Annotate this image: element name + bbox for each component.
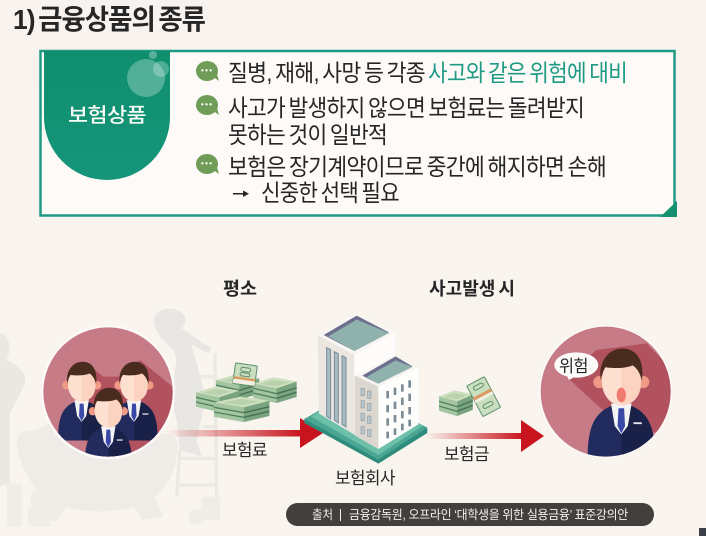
title: 1) 금융상품의 종류 — [13, 4, 205, 35]
speech bubble — [554, 352, 598, 380]
bullet text 3: 보험은 장기계약이므로 중간에 해지하면 손해 — [228, 154, 606, 180]
bundle upright — [233, 363, 257, 386]
building base — [304, 408, 427, 464]
source pill: 금융감독원, 오프라인 ‘대학생을 위한 실용금융’ 표준강의안 — [349, 508, 629, 522]
bullet text 1: 질병, 재해, 사망 등 각종 — [228, 60, 425, 86]
badge: 보험상품 — [44, 51, 170, 180]
tower window strips — [327, 348, 346, 427]
ghost: coins — [7, 483, 220, 527]
label: premium: 보험료 — [222, 441, 267, 460]
lower block — [355, 376, 378, 449]
ghost: left person — [0, 333, 25, 487]
ghost background illustration — [0, 309, 220, 527]
icon: speech bubble 2: ••• — [201, 100, 212, 109]
icon: speech bubble 3: ••• — [201, 159, 212, 168]
arrow glyph — [233, 190, 249, 197]
corner fold — [660, 201, 677, 217]
ghost: ladder — [177, 353, 217, 497]
circle: person in danger — [539, 325, 673, 461]
arrow: payout — [426, 420, 544, 452]
arrow: premium — [165, 418, 323, 448]
icon: speech bubble 3 — [196, 154, 219, 174]
ghost: piggy pot — [17, 418, 178, 522]
bullet text 3 conclusion: 신중한 선택 필요 — [261, 180, 399, 206]
corner mark — [699, 528, 706, 536]
bullet text 2 continued: 못하는 것이 일반적 — [228, 122, 387, 148]
icon: speech bubble 2 — [196, 95, 219, 115]
figure: front man — [85, 388, 132, 457]
front windows — [386, 380, 411, 438]
heading: normal times: 평소 — [223, 279, 257, 299]
mouth — [617, 388, 626, 402]
money: premium stacks — [196, 363, 297, 422]
source pill — [286, 503, 654, 526]
panel: insurance product description — [40, 51, 677, 217]
money: payout — [439, 377, 501, 417]
circle: three policyholders — [41, 325, 177, 466]
bullet text 2: 사고가 발생하지 않으면 보험료는 돌려받지 — [228, 95, 584, 121]
source pill: 출처 — [312, 508, 333, 522]
icon: speech bubble 1 — [196, 61, 219, 81]
tall tower — [318, 335, 378, 449]
figure: man shouting — [588, 348, 655, 461]
speech bubble text: 위험 — [559, 357, 588, 376]
ghost: lady — [154, 309, 212, 457]
side windows — [361, 388, 371, 437]
highlighted text: 사고와 같은 위험에 대비 — [428, 60, 627, 86]
badge: 보험상품: 보험상품 — [68, 104, 146, 127]
heading: when accident occurs: 사고발생 시 — [429, 279, 515, 299]
panel frame — [40, 51, 674, 216]
building: insurance company — [304, 313, 427, 464]
figure: right man — [110, 362, 158, 440]
figure: left man — [58, 362, 105, 440]
icon: speech bubble 1: ••• — [201, 66, 212, 75]
label: payout: 보험금 — [444, 445, 489, 464]
label: insurance company: 보험회사 — [335, 469, 396, 488]
